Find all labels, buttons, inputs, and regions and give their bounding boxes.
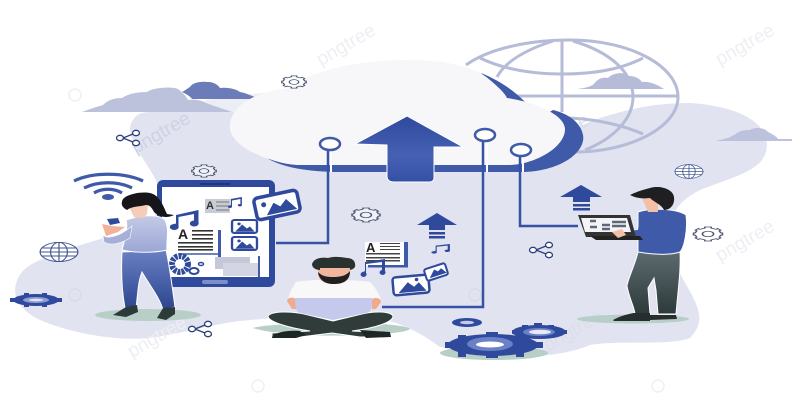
hand — [612, 229, 626, 238]
watermark texts: pngtree — [540, 306, 606, 356]
arrow: right upload — [560, 185, 602, 210]
clouds upper left — [82, 82, 270, 112]
phone content: small document and note: A — [206, 200, 214, 212]
phone content: document — [178, 226, 213, 251]
phone content: small document and note — [205, 197, 242, 213]
shoes — [113, 305, 175, 320]
gear small — [512, 323, 567, 339]
phone content: document: A — [178, 226, 188, 242]
hand and phone — [102, 224, 125, 236]
hands — [287, 298, 381, 309]
gear big — [445, 332, 543, 358]
watermark texts — [124, 20, 778, 362]
doc next to man: A — [366, 240, 376, 255]
laptop — [295, 298, 372, 320]
hair — [630, 187, 674, 210]
icon: music note middle — [361, 259, 386, 277]
icon: wifi — [74, 174, 143, 200]
head — [318, 266, 350, 284]
icon: small music note — [431, 244, 450, 254]
globe icon right — [675, 165, 703, 178]
hair — [312, 257, 355, 270]
share icon upper left — [116, 130, 140, 146]
small cloud far right — [717, 128, 792, 141]
phone content: gears — [172, 256, 204, 274]
watermark marks — [69, 89, 664, 392]
ground shadow — [95, 309, 201, 321]
watermark texts: pngtree — [313, 20, 379, 70]
face — [128, 205, 148, 218]
small cloud on globe — [577, 73, 664, 89]
phone content: picture tiles — [232, 220, 257, 250]
feet — [272, 330, 391, 338]
gear icon right — [694, 227, 722, 241]
doc next to man — [365, 240, 408, 268]
watermark texts: pngtree — [124, 312, 190, 362]
large upload arrow — [355, 116, 463, 182]
ground shadow — [253, 323, 410, 336]
watermark texts: pngtree — [712, 20, 778, 70]
globe icon left — [40, 242, 78, 262]
outline gear icon top — [282, 76, 306, 88]
white t-shirt — [288, 280, 381, 300]
legs — [627, 252, 680, 314]
icon: music note left — [170, 210, 199, 230]
icon: picture middle large — [392, 274, 430, 296]
watermark texts: pngtree — [128, 108, 194, 158]
man seated — [253, 257, 410, 338]
connector nodes — [320, 129, 531, 156]
arm — [618, 214, 650, 240]
phone content: folders — [180, 230, 260, 277]
share icon bottom left — [188, 321, 212, 337]
shoes — [613, 313, 677, 321]
crossed legs — [268, 312, 393, 337]
man standing — [577, 187, 689, 324]
beard — [318, 271, 350, 284]
laptop — [578, 215, 636, 237]
gear left — [10, 293, 62, 307]
globe — [466, 40, 678, 152]
torso — [638, 209, 687, 254]
icon: picture middle small — [424, 263, 448, 281]
main cloud — [230, 60, 565, 165]
phone device — [157, 180, 275, 287]
torso — [122, 216, 168, 252]
main cloud shadow — [262, 110, 583, 172]
watermark texts: pngtree — [527, 110, 593, 160]
neck and face — [642, 198, 658, 212]
ground shadow — [440, 346, 548, 360]
gear icon near phone — [192, 165, 216, 177]
connector lines — [276, 138, 578, 307]
icon: picture on phone corner — [253, 190, 301, 220]
arm — [103, 226, 132, 244]
lavender blob background — [15, 103, 767, 357]
hair — [122, 192, 174, 217]
share icon middle right — [530, 242, 552, 258]
watermark texts: pngtree — [712, 216, 778, 266]
gears large bottom — [440, 323, 567, 360]
gear small middle — [452, 318, 482, 327]
ground shadow — [577, 314, 689, 324]
legs — [122, 250, 175, 310]
woman — [95, 192, 201, 321]
arrow: mid upload — [417, 213, 457, 238]
gear icon middle — [352, 208, 380, 222]
